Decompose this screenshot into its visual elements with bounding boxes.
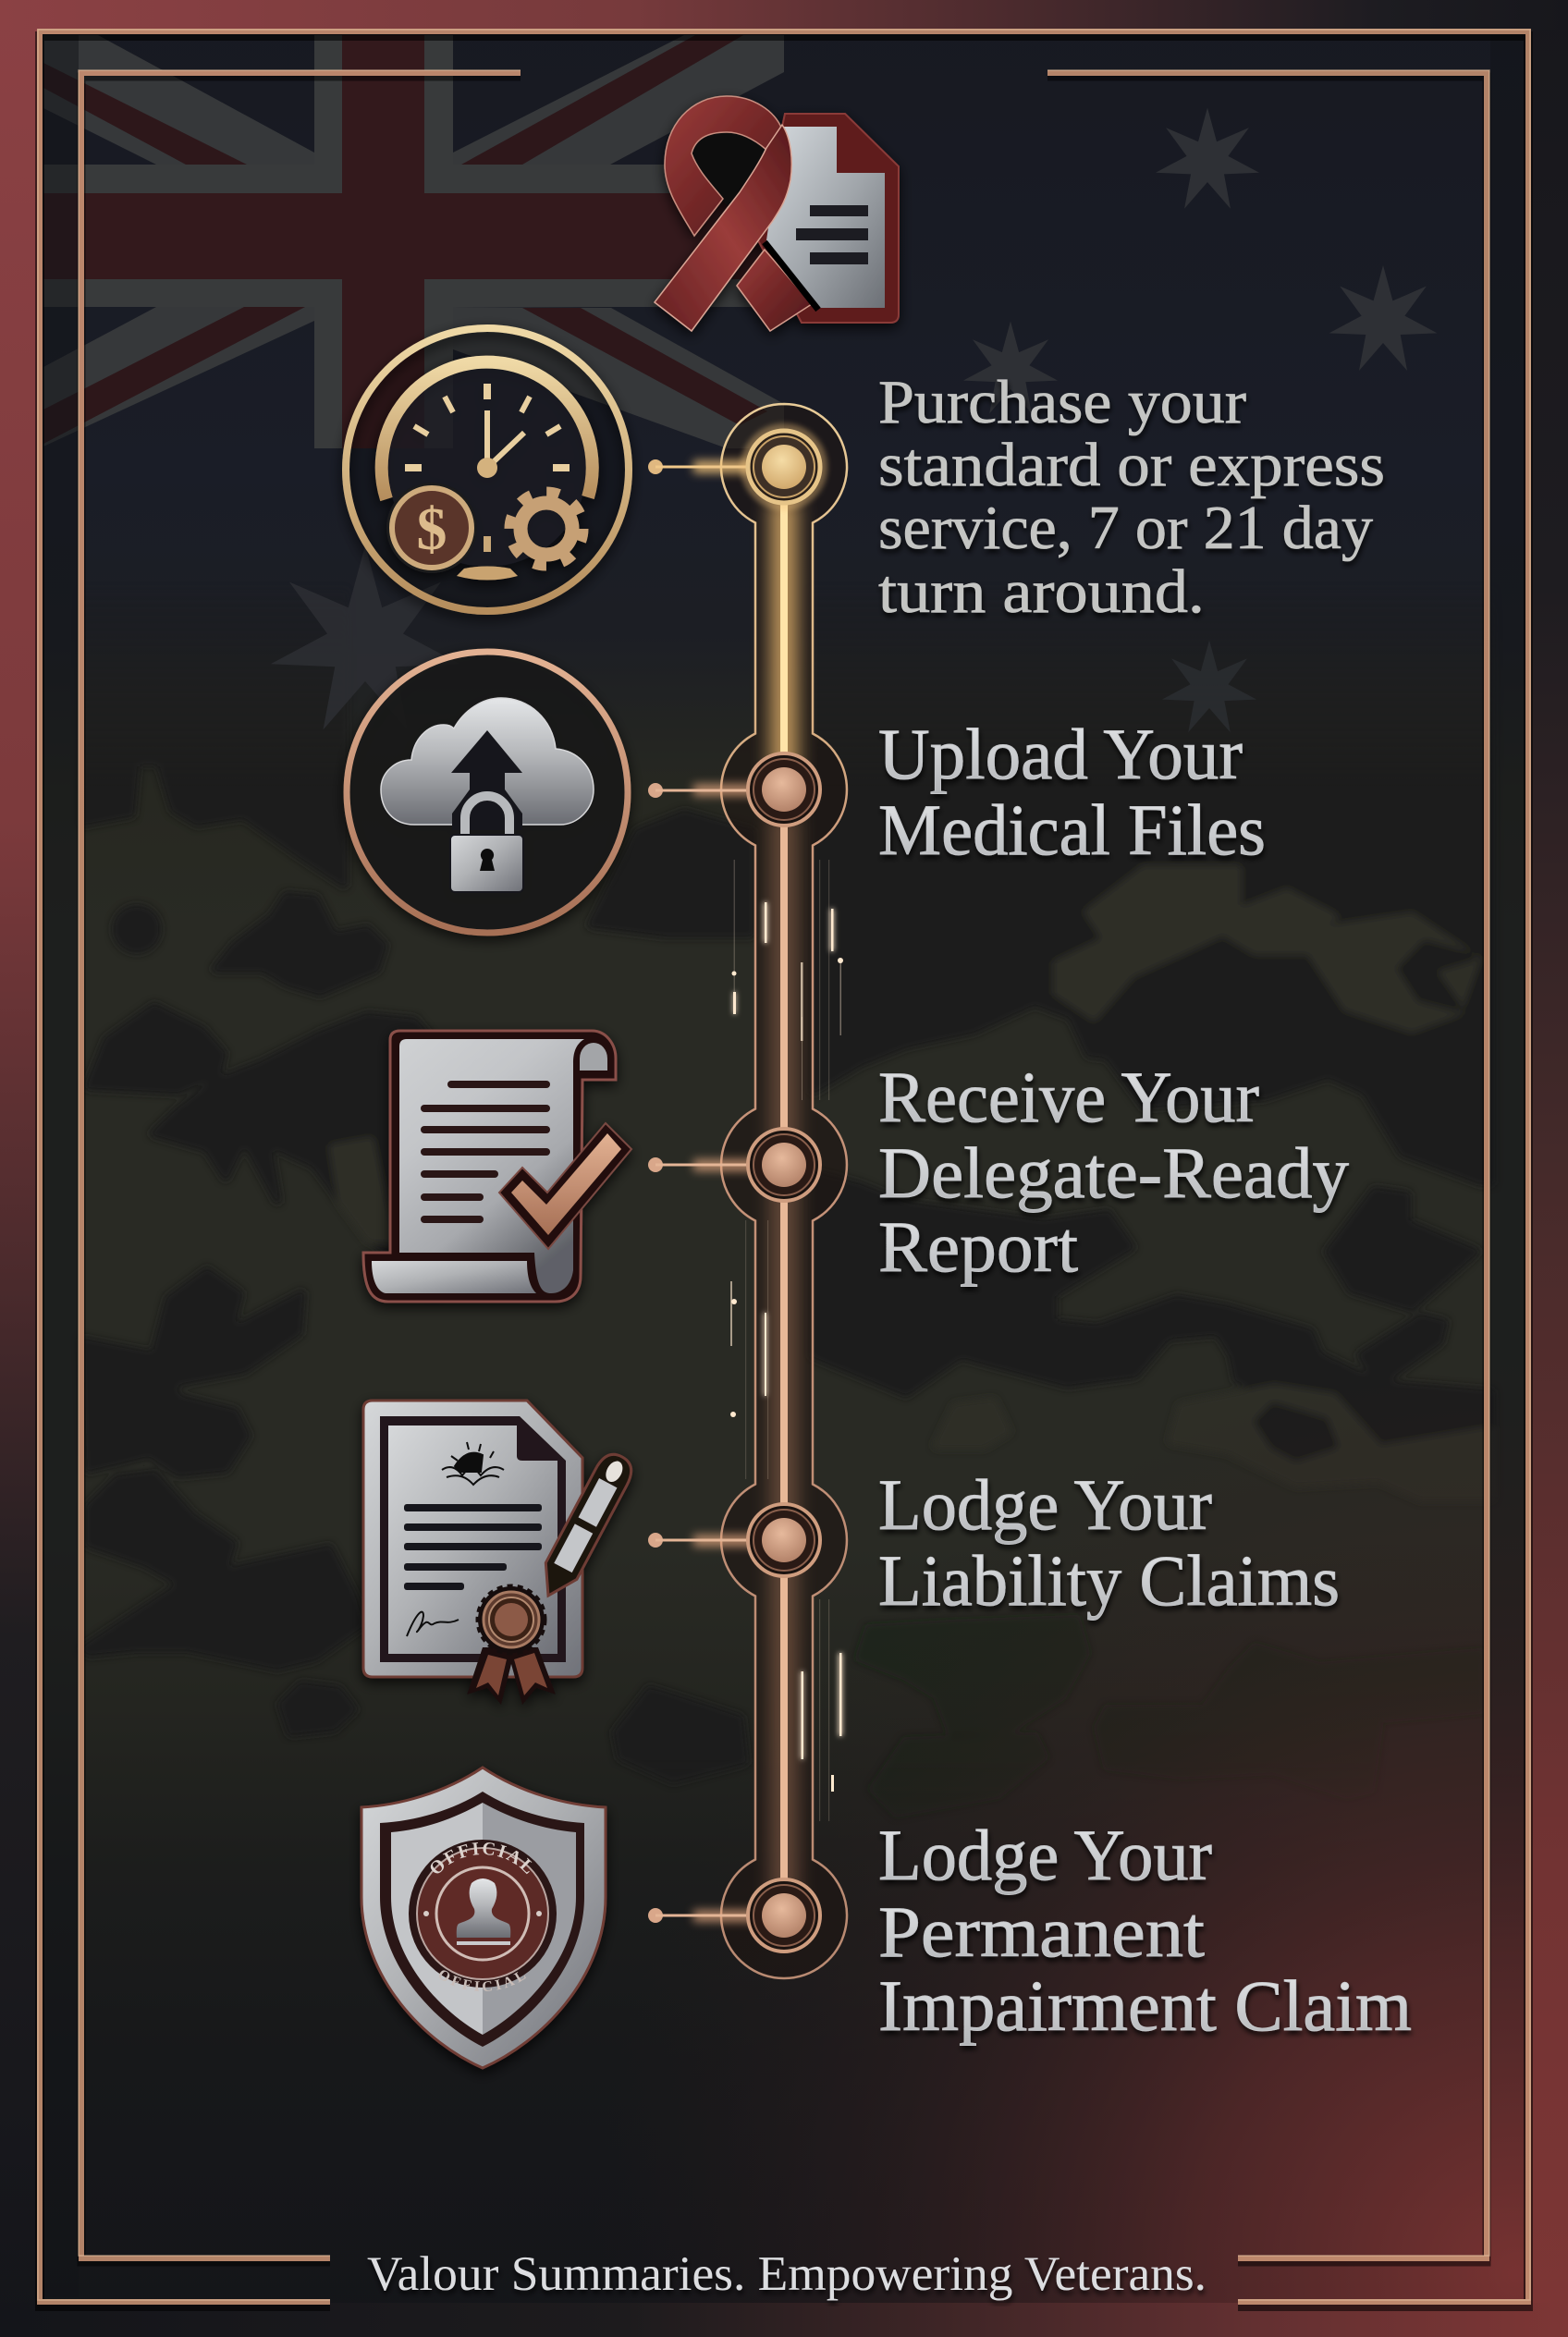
step 3 text: Receive Your — [878, 1057, 1259, 1137]
footer tagline: Valour Summaries. Empowering Veterans. — [367, 2247, 1207, 2301]
icon: signed certificate with seal and pen — [363, 1401, 638, 1705]
timeline rail — [721, 404, 847, 1978]
step 1 text: Purchase your — [878, 368, 1246, 436]
step 2 text: Upload Your — [878, 714, 1243, 794]
step 2 text: Medical Files — [878, 789, 1266, 870]
icon: cloud upload with padlock — [347, 652, 628, 933]
background: red corner glow — [0, 1202, 1568, 2337]
step 3 text: Delegate-Ready — [878, 1132, 1349, 1213]
icon: ribbon and document — [655, 96, 899, 331]
sparks along rail — [730, 860, 843, 1821]
icon: clock, coin and gear — [346, 328, 629, 611]
background: camouflage pattern — [85, 750, 1483, 1779]
step 5 text: Impairment Claim — [878, 1965, 1412, 2046]
step 4 text: Liability Claims — [878, 1540, 1340, 1621]
step 1 text: service, 7 or 21 day — [878, 494, 1374, 562]
node 5 — [648, 1879, 820, 1952]
node 2 — [648, 753, 820, 826]
step 5 text: Permanent — [878, 1891, 1205, 1972]
background: union jack flag — [43, 35, 784, 448]
step 4 text: Lodge Your — [878, 1464, 1212, 1545]
step 2 text — [878, 714, 1266, 870]
icon: shield with official stamp: OFFICIAL — [431, 1842, 533, 1875]
icon: shield with official stamp: OFFICIAL — [439, 1970, 526, 1991]
icon: report scroll with check mark — [363, 1031, 631, 1302]
node 4 — [648, 1504, 820, 1576]
step 5 text — [878, 1815, 1412, 2046]
background: faded southern cross stars — [271, 107, 1437, 732]
icon: clock, coin and gear: $ — [416, 496, 447, 563]
step 3 text: Report — [878, 1206, 1078, 1287]
node 3 — [648, 1129, 820, 1201]
step 3 text — [878, 1057, 1349, 1287]
node 1: gold — [648, 423, 827, 510]
step 1 text: turn around. — [878, 557, 1205, 626]
step 1 text — [878, 368, 1385, 626]
step 5 text: Lodge Your — [878, 1815, 1212, 1895]
step 4 text — [878, 1464, 1340, 1621]
icon: shield with official stamp — [358, 1766, 609, 2073]
step 1 text: standard or express — [878, 431, 1385, 499]
